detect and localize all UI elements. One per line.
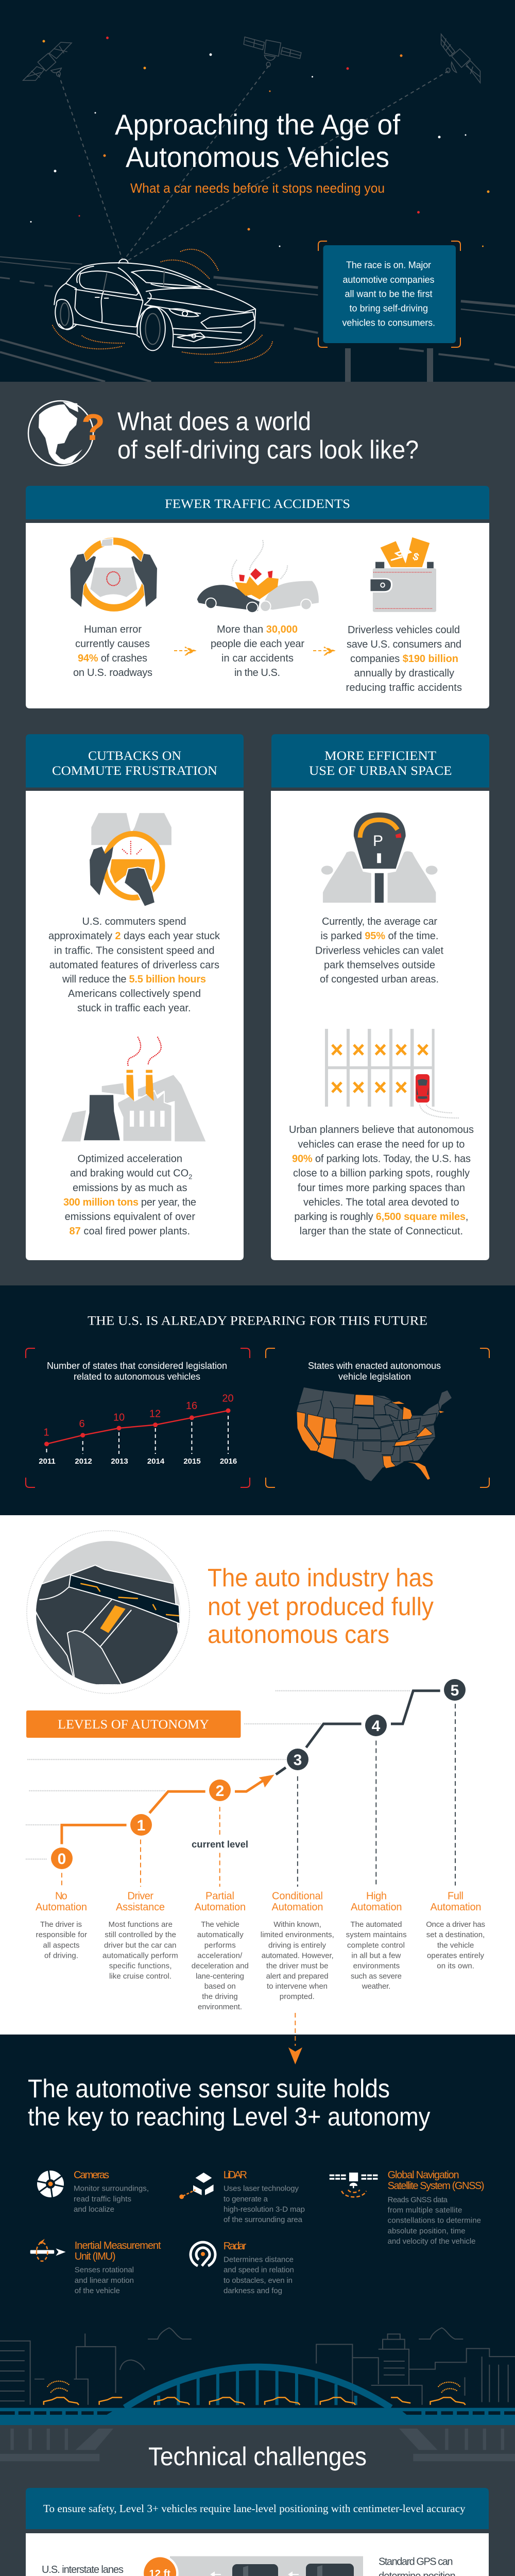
- level 4: such as severe: [351, 1972, 402, 1981]
- level 2: automatically: [197, 1930, 244, 1939]
- chart: states considering legislation line chart: [26, 1348, 250, 1487]
- level 2: [192, 1891, 249, 2011]
- level 4: in all but a few: [351, 1951, 401, 1960]
- level markers: 0: [58, 1851, 66, 1868]
- sensor: cameras: and localize: [74, 2205, 114, 2214]
- text: human error: currently causes: [75, 638, 150, 650]
- chart: states considering legislation line chart: 2015: [183, 1457, 201, 1466]
- sensor: radar: darkness and fog: [224, 2286, 282, 2295]
- arrow: [313, 647, 334, 655]
- subtitle: What a car needs before it stops needing you: [130, 180, 385, 196]
- text: parked: park themselves outside: [324, 959, 435, 971]
- level 5: operates entirely: [427, 1951, 484, 1960]
- panel: lane-level positioning: To ensure safety, Level 3+ vehicles require lane-level positioning with centimeter-level accuracy: [43, 2502, 466, 2515]
- level 4: complete control: [347, 1941, 405, 1950]
- heading: The auto industry has: [208, 1564, 434, 1592]
- sensor: lidar: high-resolution 3-D map: [224, 2205, 305, 2214]
- level 3: Automation: [272, 1902, 323, 1913]
- level 4: High: [366, 1891, 387, 1902]
- heading: of self-driving cars look like?: [117, 435, 419, 464]
- sensor: lidar: to generate a: [224, 2195, 268, 2204]
- chart: states considering legislation line chart: 2014: [147, 1457, 165, 1466]
- heading: What does a world: [117, 407, 311, 436]
- chart: states considering legislation line chart: 10: [113, 1412, 125, 1423]
- sensor: gnss: Global Navigation: [388, 2170, 459, 2181]
- panel: race callout sign: to bring self-driving: [349, 303, 428, 313]
- level 3: the driver must be: [266, 1962, 329, 1970]
- text: deaths: in car accidents: [221, 653, 294, 664]
- chart: states considering legislation line chart: 2012: [75, 1457, 92, 1466]
- text: commute: [48, 916, 220, 1014]
- chart: states considering legislation line chart: 1: [43, 1427, 49, 1438]
- level 1: [102, 1891, 178, 1981]
- panel: more efficient use of urban space: USE OF URBAN SPACE: [309, 764, 452, 778]
- text: parked: [315, 916, 443, 985]
- level 3: [261, 1891, 334, 2001]
- panel: race callout sign: vehicles to consumers.: [342, 318, 435, 328]
- label: current level: current level: [192, 1839, 248, 1850]
- chart: states considering legislation line chart: Number of states that considered legislation: [47, 1361, 227, 1371]
- sensor: gnss: Reads GNSS data: [388, 2196, 448, 2204]
- chart: states considering legislation line chart: 2011: [39, 1457, 56, 1466]
- text: urban planners: 90% of parking lots. Today, the U.S. has: [292, 1153, 471, 1164]
- chart: states considering legislation line chart: 2013: [111, 1457, 128, 1466]
- panel: race callout sign: all want to be the first: [345, 289, 433, 299]
- sensor: radar: and speed in relation: [224, 2266, 294, 2275]
- level 2: Automation: [195, 1902, 246, 1913]
- level 0: all aspects: [43, 1941, 79, 1950]
- level 3: driving is entirely: [268, 1941, 327, 1950]
- text: urban planners: close to a billion parking spots, roughly: [293, 1168, 470, 1179]
- panel: levels of autonomy section: [0, 1515, 515, 2035]
- icon: satellite: [330, 2173, 377, 2197]
- level 2: The vehicle: [201, 1920, 239, 1929]
- level 0: Automation: [36, 1902, 87, 1913]
- text: parked: is parked 95% of the time.: [320, 930, 438, 942]
- heading: THE U.S. IS ALREADY PREPARING FOR THIS FUTURE: [88, 1314, 427, 1328]
- level 0: of driving.: [44, 1951, 78, 1960]
- level markers: 1: [137, 1817, 145, 1834]
- map: states with enacted legislation: [266, 1348, 489, 1487]
- text: commute: approximately 2 days each year stuck: [48, 930, 220, 942]
- sensor: gnss: constellations to determine: [388, 2216, 481, 2225]
- level 3: automated. However,: [262, 1951, 334, 1960]
- level 1: Assistance: [116, 1902, 165, 1913]
- level 2: performs: [204, 1941, 236, 1950]
- level 0: No: [55, 1891, 67, 1902]
- text: emissions: emissions equivalent of over: [65, 1211, 195, 1223]
- road lines: [0, 257, 515, 382]
- text: savings: reducing traffic accidents: [346, 682, 462, 693]
- title: [115, 108, 400, 173]
- heading: not yet produced fully: [208, 1593, 434, 1621]
- panel: more efficient use of urban space: P: [373, 833, 383, 850]
- chart: states considering legislation line chart: 12: [149, 1408, 161, 1419]
- level 1: still controlled by the: [105, 1930, 176, 1939]
- panel: race callout sign: automotive companies: [343, 275, 435, 285]
- panel: fewer traffic accidents: FEWER TRAFFIC ACCIDENTS: [165, 497, 350, 511]
- level 1: specific functions,: [109, 1962, 172, 1970]
- sensor: imu: Unit (IMU): [75, 2251, 115, 2262]
- heading: [208, 1564, 434, 1649]
- bridge supports: [0, 2429, 515, 2461]
- text: parked: Currently, the average car: [322, 916, 437, 927]
- level 4: weather.: [362, 1982, 390, 1991]
- sensor: cameras: Cameras: [74, 2170, 109, 2181]
- level 1: Most functions are: [108, 1920, 173, 1929]
- level 2: the driving: [202, 1992, 238, 2001]
- sensor: imu: of the vehicle: [75, 2286, 120, 2295]
- icon: globe with question mark: [28, 401, 105, 466]
- level 4: environments: [353, 1962, 400, 1970]
- level 3: Within known,: [273, 1920, 321, 1929]
- text: urban planners: [289, 1124, 474, 1237]
- text: standard gps: [379, 2556, 466, 2576]
- icon: power plant: [61, 1037, 205, 1142]
- heading: Technical challenges: [148, 2442, 367, 2471]
- level 1: like cruise control.: [109, 1972, 171, 1981]
- sensor: gnss: from multiple satellite: [388, 2206, 462, 2215]
- sensor: gnss: absolute position, time: [388, 2227, 466, 2235]
- level 3: limited environments,: [261, 1930, 334, 1939]
- panel: hero: [0, 0, 515, 382]
- level 5: Once a driver has: [426, 1920, 485, 1929]
- level 2: environment.: [198, 2003, 242, 2011]
- illustration: dashboard in dotted circle: [27, 1531, 190, 1702]
- level 3: prompted.: [280, 1992, 315, 2001]
- text: urban planners: Urban planners believe that autonomous: [289, 1124, 474, 1136]
- text: human error: [73, 624, 152, 679]
- chart: states considering legislation line chart: 20: [222, 1393, 234, 1404]
- panel: lane-level positioning: [26, 2488, 489, 2576]
- icon: camera aperture: [36, 2169, 65, 2199]
- arrow: [174, 647, 195, 655]
- icon: traffic steering wheel: [90, 813, 171, 907]
- level markers: 4: [372, 1718, 381, 1735]
- sensor: imu: Senses rotational: [75, 2266, 134, 2275]
- text: urban planners: vehicles can erase the need for up to: [298, 1139, 465, 1150]
- sensor: cameras: [36, 2169, 149, 2214]
- icon: lidar cube: [179, 2173, 214, 2199]
- icon: wallet: [370, 537, 436, 612]
- level 4: Automation: [351, 1902, 402, 1913]
- heading: [28, 2074, 431, 2131]
- text: deaths: people die each year: [211, 638, 304, 650]
- level 5: [426, 1891, 485, 1970]
- level markers: 3: [294, 1752, 302, 1769]
- sensor: imu: [30, 2239, 161, 2295]
- text: deaths: [211, 624, 304, 679]
- text: urban planners: parking is roughly 6,500 square miles,: [294, 1211, 468, 1223]
- level 5: the vehicle: [437, 1941, 474, 1950]
- icon: radar: [191, 2242, 215, 2266]
- heading: autonomous cars: [208, 1621, 389, 1649]
- level 2: deceleration and: [192, 1962, 249, 1970]
- text: savings: save U.S. consumers and: [347, 639, 461, 650]
- icon: car crash: [197, 541, 319, 613]
- panel: cutbacks on commute frustration: COMMUTE FRUSTRATION: [52, 764, 217, 778]
- text: lane width: U.S. interstate lanes: [42, 2564, 124, 2575]
- panel: race callout sign: The race is on. Major: [346, 260, 431, 270]
- text: emissions: and braking would cut CO: [70, 1168, 188, 1179]
- sensor: imu: Inertial Measurement: [75, 2240, 161, 2251]
- text: commute: will reduce the 5.5 billion hours: [62, 974, 206, 985]
- level 1: automatically perform: [102, 1951, 178, 1960]
- sensor: lidar: LiDAR: [224, 2170, 247, 2181]
- text: deaths: More than 30,000: [217, 624, 298, 635]
- chart: states considering legislation line chart: related to autonomous vehicles: [74, 1371, 200, 1382]
- sensor: gnss: Satellite System (GNSS): [388, 2180, 485, 2192]
- sensor: radar: [191, 2241, 294, 2295]
- panel: fewer traffic accidents: [26, 486, 489, 708]
- illustration: city skyline and bridge: [0, 2328, 515, 2425]
- text: commute: Americans collectively spend: [68, 988, 201, 999]
- text: urban planners: four times more parking spaces than: [298, 1182, 465, 1194]
- text: emissions: Optimized acceleration: [77, 1153, 182, 1164]
- level 5: Automation: [431, 1902, 481, 1913]
- panel: U.S. preparing section: [0, 1285, 515, 1515]
- level 0: responsible for: [36, 1930, 87, 1939]
- chart: autonomy staircase: [26, 1691, 455, 1887]
- map: states with enacted legislation: vehicle legislation: [338, 1371, 411, 1382]
- stars: [30, 37, 489, 247]
- text: standard gps: Standard GPS can: [379, 2556, 453, 2568]
- panel: technical challenges section: [0, 2425, 515, 2576]
- panel: cutbacks on commute frustration: [26, 734, 244, 1260]
- icon: parking lot: [325, 1029, 458, 1118]
- level 3: alert and prepared: [266, 1972, 329, 1981]
- sensor: cameras: Monitor surroundings,: [74, 2184, 149, 2193]
- text: savings: [346, 624, 462, 693]
- text: human error: 94% of crashes: [78, 653, 147, 664]
- sensor: radar: Determines distance: [224, 2256, 294, 2264]
- level 4: [346, 1891, 407, 1991]
- text: savings: annually by drastically: [354, 668, 454, 679]
- sensor: lidar: of the surrounding area: [224, 2215, 303, 2224]
- icon: parking meter: [321, 812, 438, 903]
- icon: inertial arrow: [30, 2239, 66, 2261]
- panel: fewer traffic accidents: $: [411, 551, 420, 564]
- text: commute: U.S. commuters spend: [82, 916, 186, 927]
- sensor: gnss: [330, 2170, 485, 2246]
- panel: race callout sign: [318, 241, 460, 382]
- panel: more efficient use of urban space: [271, 734, 489, 1260]
- chart: states considering legislation line chart: 16: [186, 1400, 197, 1412]
- level 1: Driver: [128, 1891, 153, 1902]
- diagram: road lanes: [142, 2555, 363, 2576]
- text: human error: on U.S. roadways: [73, 667, 152, 679]
- text: emissions: emissions by as much as: [73, 1182, 187, 1194]
- heading: the key to reaching Level 3+ autonomy: [28, 2102, 431, 2131]
- heading: [117, 407, 419, 464]
- text: commute: automated features of driverless cars: [49, 959, 219, 971]
- level markers: 2: [216, 1783, 224, 1800]
- text: emissions: 2: [188, 1173, 192, 1181]
- icon: steering wheel with hands: [70, 538, 158, 608]
- panel: more efficient use of urban space: MORE EFFICIENT: [324, 749, 436, 763]
- badge: levels of autonomy: LEVELS OF AUTONOMY: [58, 1718, 209, 1732]
- chart: states considering legislation line chart: 6: [79, 1418, 85, 1430]
- sensor: imu: and linear motion: [75, 2276, 134, 2285]
- title: Autonomous Vehicles: [126, 141, 389, 173]
- level 3: Conditional: [272, 1891, 323, 1902]
- level 4: system maintains: [346, 1930, 407, 1939]
- panel: cutbacks on commute frustration: CUTBACKS ON: [88, 749, 181, 763]
- panel: sensor suite section: [0, 2013, 515, 2425]
- sensor: lidar: [179, 2170, 305, 2224]
- sensor: radar: Radar: [224, 2241, 247, 2252]
- icon: globe with question mark: ?: [81, 407, 105, 448]
- arrow: down to sensors: [288, 2013, 302, 2064]
- text: urban planners: vehicles. The total area devoted to: [303, 1197, 459, 1208]
- sensor: radar: to obstacles, even in: [224, 2276, 293, 2285]
- level 3: to intervene when: [267, 1982, 328, 1991]
- text: commute: stuck in traffic each year.: [77, 1003, 191, 1014]
- level 5: set a destination,: [426, 1930, 485, 1939]
- badge: 12 ft: [142, 2555, 179, 2576]
- sensor: gnss: and velocity of the vehicle: [388, 2237, 476, 2246]
- text: savings: companies $190 billion: [350, 653, 458, 665]
- title: Approaching the Age of: [115, 108, 400, 141]
- icon: satellites: [23, 34, 480, 83]
- heading: The automotive sensor suite holds: [28, 2074, 390, 2103]
- panel: what does a world look like section: [0, 382, 515, 1286]
- sensor: cameras: read traffic lights: [74, 2195, 131, 2204]
- text: parked: Driverless vehicles can valet: [315, 945, 443, 956]
- level 0: The driver is: [40, 1920, 82, 1929]
- text: emissions: 300 million tons per year, the: [63, 1197, 196, 1208]
- text: emissions: [63, 1153, 196, 1237]
- text: emissions: 87 coal fired power plants.: [69, 1226, 190, 1237]
- level 2: based on: [204, 1982, 236, 1991]
- badge: levels of autonomy: [26, 1710, 241, 1738]
- level markers: 5: [451, 1682, 459, 1699]
- sensor: lidar: Uses laser technology: [224, 2184, 299, 2193]
- map: states with enacted legislation: States with enacted autonomous: [308, 1361, 441, 1371]
- chart: states considering legislation line chart: 2016: [220, 1457, 237, 1466]
- level 5: Full: [448, 1891, 464, 1902]
- text: parked: of congested urban areas.: [320, 974, 439, 985]
- text: urban planners: larger than the state of Connecticut.: [300, 1226, 463, 1237]
- illustration: car outline: [53, 249, 272, 363]
- text: commute: in traffic. The consistent speed and: [54, 945, 214, 956]
- level 4: The automated: [350, 1920, 402, 1929]
- level 1: driver but the car can: [104, 1941, 176, 1950]
- signal lines from satellites to car: [59, 65, 449, 260]
- level 0: [36, 1891, 87, 1960]
- text: savings: Driverless vehicles could: [348, 624, 460, 636]
- text: human error: Human error: [84, 624, 142, 635]
- level 2: Partial: [205, 1891, 234, 1902]
- level 2: acceleration/: [197, 1951, 243, 1960]
- level 5: on its own.: [437, 1962, 474, 1970]
- text: deaths: in the U.S.: [234, 667, 280, 679]
- level 2: lane-centering: [196, 1972, 244, 1981]
- level markers: [51, 1679, 466, 1869]
